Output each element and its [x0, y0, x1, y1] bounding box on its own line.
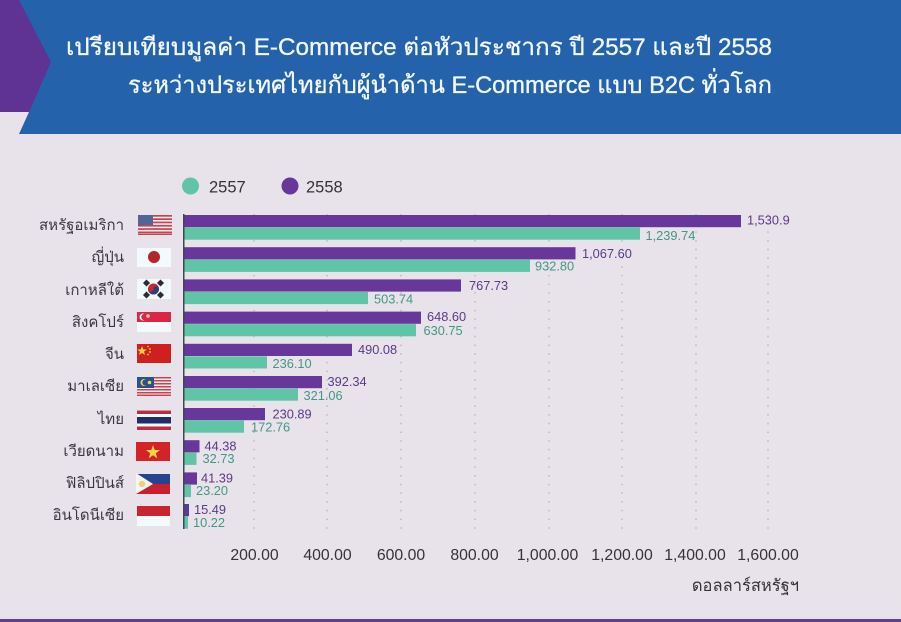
icon: flag Singapore — [137, 312, 171, 332]
row: Thailand: 172.76 — [251, 420, 290, 434]
x axis labels: 200.00 — [230, 547, 279, 564]
row: China: 236.10 — [272, 356, 312, 371]
row: Japan: 932.80 — [535, 258, 574, 274]
row: Japan: 1,067.60 — [582, 246, 632, 261]
row: Philippines: 41.39 — [201, 470, 233, 486]
x axis labels — [230, 547, 799, 564]
x axis labels: 1,000.00 — [517, 547, 578, 564]
row: Singapore: 630.75 — [424, 323, 463, 338]
icon: flag Thailand — [137, 410, 171, 430]
row: South Korea: 767.73 — [469, 278, 508, 293]
x axis labels: 400.00 — [303, 547, 352, 564]
icon: flag Philippines — [136, 473, 170, 494]
icon: flag Indonesia — [137, 506, 170, 526]
row: Malaysia: 392.34 — [328, 374, 367, 389]
country labels: เวียดนาม — [63, 443, 124, 460]
icon: flag Japan — [137, 248, 171, 267]
x axis labels: 800.00 — [450, 547, 499, 564]
row: Philippines — [184, 470, 233, 498]
country labels: มาเลเซีย — [67, 378, 124, 395]
country labels: ญี่ปุ่น — [91, 246, 124, 267]
icon: flag Vietnam — [136, 442, 170, 461]
row: United States: 1,239.74 — [646, 228, 695, 243]
row: South Korea: 503.74 — [374, 292, 413, 306]
row: Philippines: 23.20 — [196, 483, 228, 498]
icon: flag South Korea — [137, 279, 171, 299]
row: Thailand — [184, 406, 312, 434]
bar chart — [184, 212, 790, 530]
bottom rule — [0, 619, 901, 622]
axis unit: ดอลลาร์สหรัฐฯ — [692, 576, 799, 595]
country labels: สหรัฐอเมริกา — [39, 217, 124, 234]
row: Japan — [184, 246, 632, 274]
legend — [182, 178, 343, 196]
title — [66, 34, 772, 100]
x axis labels: 600.00 — [377, 547, 425, 564]
purple arrow accent — [0, 0, 51, 112]
x axis labels: 1,400.00 — [664, 547, 726, 564]
row: China — [184, 342, 397, 371]
row: Singapore: 648.60 — [427, 309, 466, 324]
x axis labels: 1,200.00 — [591, 547, 653, 564]
flags — [136, 215, 172, 526]
icon: flag United States — [138, 215, 172, 235]
icon: flag China — [137, 344, 171, 363]
vertical axis — [183, 214, 184, 529]
country labels: เกาหลีใต้ — [65, 281, 124, 299]
legend: 2557 — [209, 178, 246, 196]
row: United States: 1,530.9 — [747, 212, 790, 228]
icon: flag Malaysia — [137, 377, 171, 396]
country labels: อินโดนีเซีย — [53, 506, 124, 524]
x axis labels: 1,600.00 — [737, 547, 799, 564]
row: Singapore — [184, 309, 466, 338]
row: Vietnam: 32.73 — [202, 451, 235, 466]
country labels: สิงคโปร์ — [72, 313, 124, 331]
row: Vietnam — [184, 438, 237, 466]
row: Indonesia — [184, 502, 226, 530]
row: Thailand: 230.89 — [272, 406, 312, 422]
title: เปรียบเทียบมูลค่า E-Commerce ต่อหัวประชากร ปี 2557 และปี 2558 — [66, 34, 772, 62]
country labels: จีน — [105, 346, 124, 363]
country labels — [39, 217, 124, 524]
header banner — [15, 0, 901, 134]
title: ระหว่างประเทศไทยกับผู้นำด้าน E-Commerce แบบ B2C ทั่วโลก — [128, 68, 772, 100]
row: Indonesia: 10.22 — [193, 515, 225, 530]
row: United States — [184, 212, 790, 243]
row: Indonesia: 15.49 — [194, 502, 226, 517]
legend: 2558 — [306, 178, 343, 196]
row: China: 490.08 — [358, 342, 397, 357]
row: Vietnam: 44.38 — [204, 438, 237, 454]
country labels: ไทย — [97, 410, 124, 428]
row: Malaysia — [184, 374, 367, 403]
country labels: ฟิลิปปินส์ — [66, 475, 124, 492]
row: South Korea — [184, 278, 508, 306]
row: Malaysia: 321.06 — [304, 388, 343, 403]
